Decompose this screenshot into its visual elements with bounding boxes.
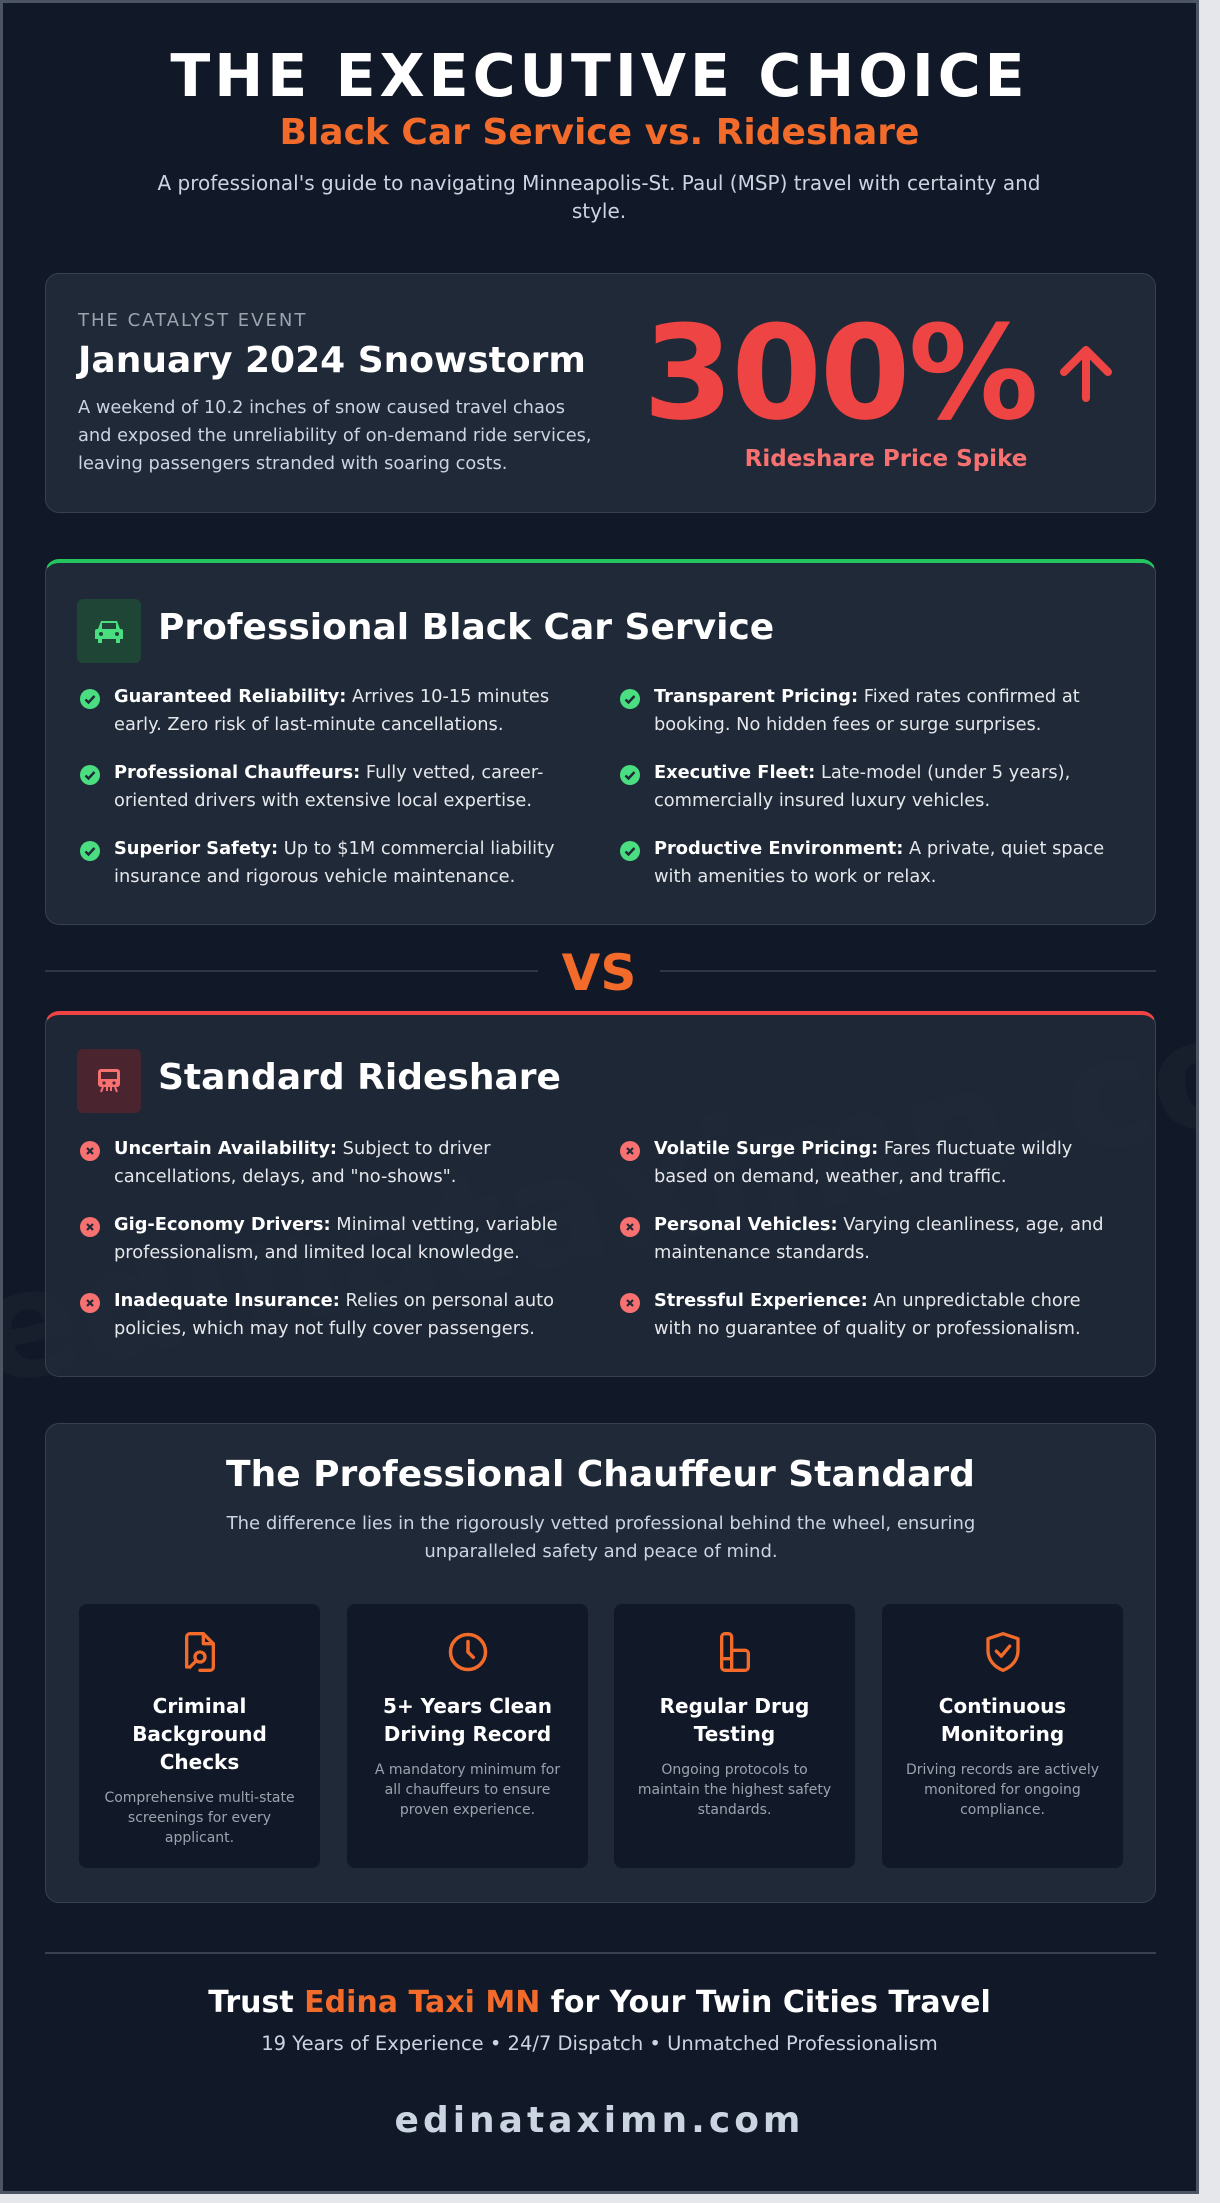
title: THE EXECUTIVE CHOICE [170, 42, 1029, 110]
drawback list: Volatile Surge Pricing: Fares fluctuate wildly based on demand, weather, and traffic. [654, 1138, 1072, 1187]
card: drug testing [614, 1604, 855, 1868]
catalyst text: A weekend of 10.2 inches of snow caused travel chaos and exposed the unreliability of on-demand ride services, leaving passengers stranded with soaring costs. [78, 397, 592, 474]
heading: The Professional Chauffeur Standard [226, 1454, 975, 1495]
icon: rideshare bus [77, 1049, 141, 1113]
icon: up arrow [1060, 346, 1112, 402]
benefit list: Professional Chauffeurs: Fully vetted, career-oriented drivers with extensive local expertise. [114, 762, 543, 811]
footer tagline: 19 Years of Experience • 24/7 Dispatch • Unmatched Professionalism [261, 2032, 938, 2055]
card: monitoring: Continuous Monitoring [939, 1694, 1066, 1746]
panel: black car service [45, 559, 1156, 925]
heading: Professional Black Car Service [158, 607, 774, 648]
stat label: Rideshare Price Spike [745, 446, 1027, 472]
icon: car [77, 599, 141, 663]
benefit list: Productive Environment: A private, quiet space with amenities to work or relax. [654, 838, 1104, 887]
panel: chauffeur standard [45, 1423, 1156, 1903]
panel: catalyst event [45, 273, 1156, 513]
card: background checks: Comprehensive multi-state screenings for every applicant. [104, 1790, 295, 1846]
card: background checks [79, 1604, 320, 1868]
subtitle: Black Car Service vs. Rideshare [280, 112, 919, 153]
tagline: A professional's guide to navigating Minneapolis-St. Paul (MSP) travel with certainty and style. [158, 171, 1040, 223]
card: drug testing: Regular Drug Testing [660, 1694, 809, 1746]
drawback list: Uncertain Availability: Subject to driver cancellations, delays, and "no-shows". [114, 1138, 491, 1187]
footer headline: Trust Edina Taxi MN for Your Twin Cities Travel [208, 1985, 991, 2020]
card: driving record [347, 1604, 588, 1868]
drawback list: Stressful Experience: An unpredictable chore with no guarantee of quality or professionalism. [654, 1290, 1081, 1339]
catalyst label: THE CATALYST EVENT [78, 310, 307, 331]
drawback list: Personal Vehicles: Varying cleanliness, age, and maintenance standards. [654, 1214, 1104, 1263]
drawback list: Inadequate Insurance: Relies on personal auto policies, which may not fully cover passengers. [114, 1290, 554, 1339]
description: The difference lies in the rigorously vetted professional behind the wheel, ensuring unparalleled safety and peace of mind. [227, 1513, 975, 1562]
drawback list: Gig-Economy Drivers: Minimal vetting, variable professionalism, and limited local knowledge. [114, 1214, 558, 1263]
catalyst heading: January 2024 Snowstorm [78, 340, 586, 381]
VS label: VS [562, 944, 636, 1002]
website url: edinataximn.com [395, 2100, 804, 2141]
card: background checks: Criminal Background Checks [132, 1694, 267, 1774]
benefit list [80, 686, 1104, 887]
benefit list: Guaranteed Reliability: Arrives 10-15 minutes early. Zero risk of last-minute cancellations. [114, 686, 549, 735]
card: drug testing: Ongoing protocols to maintain the highest safety standards. [638, 1762, 831, 1818]
benefit list: Executive Fleet: Late-model (under 5 years), commercially insured luxury vehicles. [654, 762, 1070, 811]
panel: standard rideshare [45, 1011, 1156, 1377]
benefit list: Transparent Pricing: Fixed rates confirmed at booking. No hidden fees or surge surprises. [654, 686, 1080, 735]
card: driving record: A mandatory minimum for all chauffeurs to ensure proven experience. [375, 1762, 560, 1818]
card: driving record: 5+ Years Clean Driving Record [383, 1694, 552, 1746]
benefit list: Superior Safety: Up to $1M commercial liability insurance and rigorous vehicle maintenance. [114, 838, 555, 887]
stat: 300%: 300% [643, 297, 1037, 449]
drawback list [80, 1138, 1104, 1339]
card: monitoring: Driving records are actively monitored for ongoing compliance. [906, 1762, 1099, 1818]
card: monitoring [882, 1604, 1123, 1868]
heading: Standard Rideshare [158, 1057, 561, 1098]
